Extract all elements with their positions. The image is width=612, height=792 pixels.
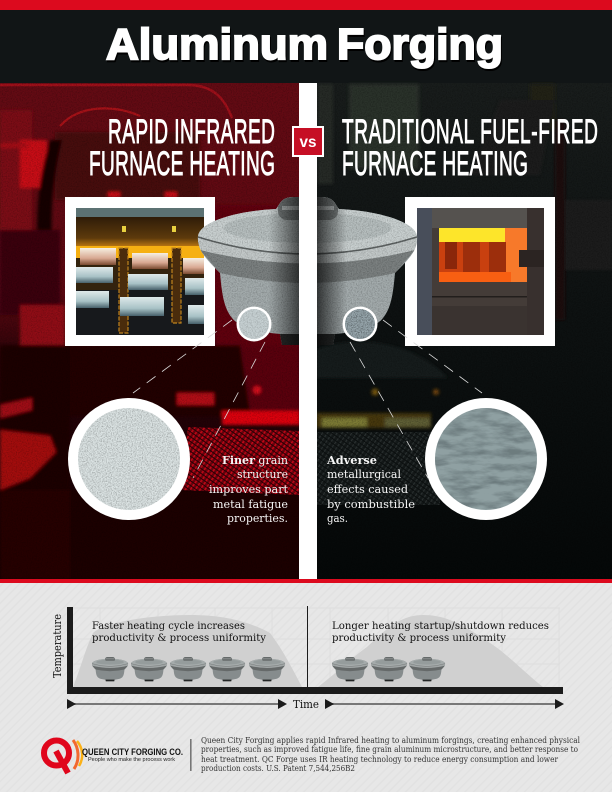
- right heading: [342, 112, 598, 182]
- dashed callout lines: right: [350, 320, 482, 478]
- vs badge: [292, 126, 324, 157]
- header band: [0, 10, 612, 83]
- right curve: longer cycle: [318, 615, 543, 687]
- finer grain text: improves part: [209, 482, 288, 496]
- large fine grain circle: [68, 398, 190, 520]
- left curve: faster cycle: [73, 615, 302, 687]
- temperature label: Temperature: [51, 614, 64, 678]
- finer grain text: structure: [237, 467, 288, 481]
- large adverse grain circle: [425, 398, 547, 520]
- caption: faster: Faster heating cycle increases: [92, 620, 245, 632]
- company description: heat treatment. QC Forge uses IR heating technology to reduce energy consumption and lower: [201, 754, 558, 764]
- logo mark: [44, 740, 82, 773]
- adverse effects text: gas.: [327, 511, 348, 525]
- caption: longer: [332, 620, 549, 644]
- small grain circle: right: [342, 306, 378, 342]
- dashed callout lines: left: [133, 320, 265, 478]
- footer divider: [190, 739, 192, 771]
- adverse effects text: effects caused: [327, 482, 409, 496]
- logo name: QUEEN CITY FORGING CO.: [82, 747, 183, 757]
- title: Forging: [337, 20, 503, 69]
- caption: longer: productivity & process uniformity: [332, 632, 506, 644]
- adverse effects text: metallurgical: [327, 467, 401, 481]
- five part icons: [91, 656, 286, 682]
- panel: left red photo background: [0, 83, 300, 580]
- company description: production costs. U.S. Patent 7,544,256B2: [201, 763, 355, 773]
- finer grain text: [209, 453, 289, 525]
- finer grain text: Finer grain: [222, 453, 289, 467]
- panel: right dark photo background: [316, 83, 612, 580]
- caption: longer: Longer heating startup/shutdown reduces: [332, 620, 549, 632]
- divider between cycles: [307, 606, 308, 687]
- axes: [67, 607, 563, 694]
- adverse effects text: Adverse: [326, 453, 377, 467]
- small grain circle: left: [236, 306, 272, 342]
- finer grain text: properties.: [227, 511, 288, 525]
- center divider: [299, 83, 317, 580]
- top red bar: [0, 0, 612, 10]
- logo: Queen City Forging Co.: [44, 740, 183, 773]
- caption: faster: [92, 620, 266, 644]
- panel: lower section background: [0, 583, 612, 792]
- left heading: [89, 112, 275, 182]
- chart: temperature over time: [51, 606, 563, 694]
- right heading: TRADITIONAL FUEL-FIRED: [342, 112, 598, 150]
- photo: fuel-fired furnace: [405, 197, 555, 346]
- bottom red rule: [0, 579, 612, 583]
- company description: [201, 735, 580, 773]
- right heading: FURNACE HEATING: [342, 144, 528, 182]
- time arrow: left: [67, 699, 287, 709]
- vs badge: vs: [300, 134, 317, 151]
- forged aluminum part: [198, 197, 418, 345]
- time arrow: right: [325, 699, 564, 709]
- adverse effects text: by combustible: [327, 497, 415, 511]
- three part icons: [331, 656, 446, 682]
- time label: Time: [293, 698, 319, 711]
- title: [106, 20, 503, 69]
- caption: faster: productivity & process uniformity: [92, 632, 266, 644]
- photo: infrared furnace rollers: [65, 197, 215, 346]
- left heading: RAPID INFRARED: [108, 112, 275, 150]
- finer grain text: metal fatigue: [213, 497, 288, 511]
- left heading: FURNACE HEATING: [89, 144, 275, 182]
- logo tagline: People who make the process work: [88, 757, 175, 763]
- title: Aluminum: [106, 20, 328, 69]
- adverse effects text: [326, 453, 415, 525]
